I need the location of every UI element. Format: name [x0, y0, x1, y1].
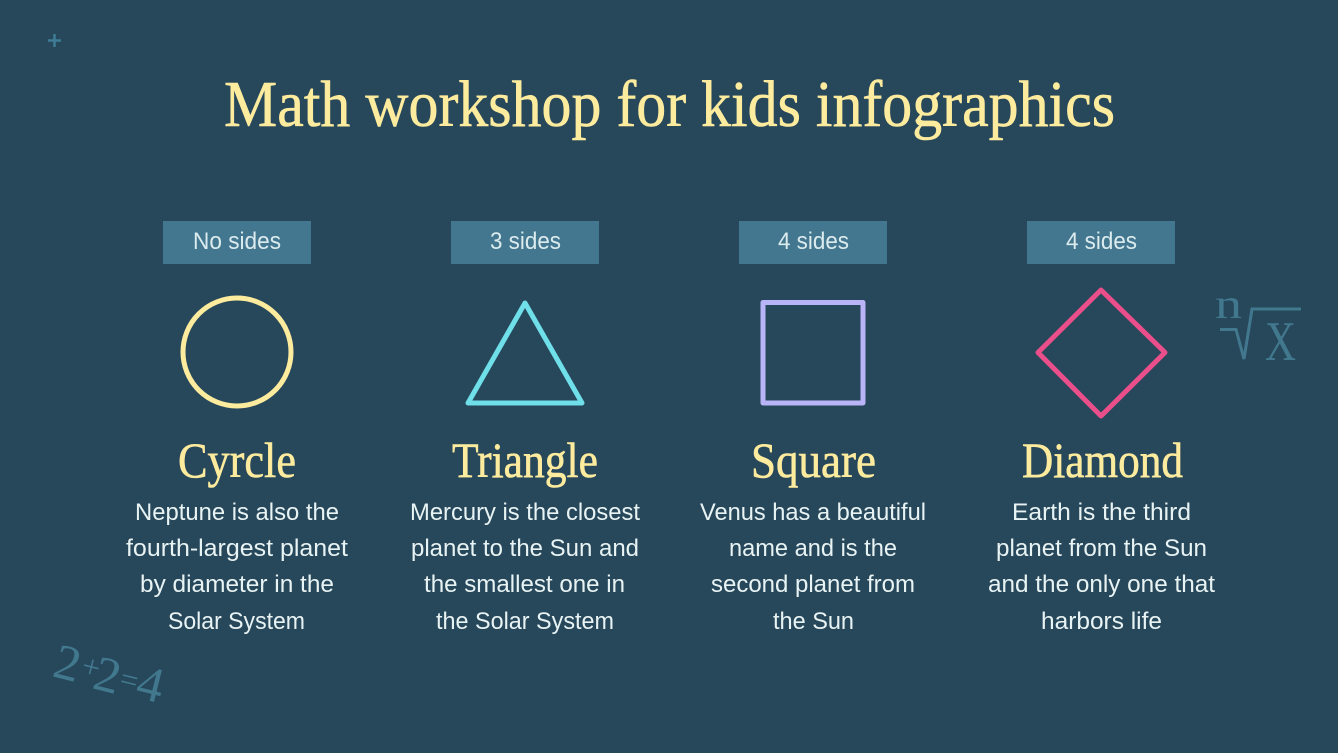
description: square: Venus has a beautiful — [700, 499, 926, 526]
icon: diamond — [1038, 290, 1165, 416]
heading: Diamond: Diamond — [1022, 432, 1183, 488]
column: triangle — [410, 221, 640, 635]
decorative formula: nth root of x — [1215, 282, 1301, 373]
column: diamond — [988, 221, 1215, 635]
badge: no sides — [163, 221, 311, 264]
decorative plus sign — [48, 34, 61, 47]
decorative formula: 2+2=4: 2 — [88, 644, 127, 705]
description: triangle: the Solar System — [436, 608, 614, 635]
description: circle: Neptune is also the — [135, 499, 339, 526]
description: diamond: planet from the Sun — [996, 535, 1207, 562]
description: triangle: the smallest one in — [424, 571, 625, 598]
description: diamond — [988, 499, 1215, 635]
description: triangle: Mercury is the closest — [410, 499, 640, 526]
description: square: second planet from — [711, 571, 915, 598]
heading: Cyrcle: Cyrcle — [178, 432, 296, 488]
badge: 4 sides: 4 sides — [778, 228, 849, 255]
description: triangle: planet to the Sun and — [411, 535, 639, 562]
description: circle: by diameter in the — [140, 571, 334, 598]
description: circle: fourth-largest planet — [126, 535, 348, 562]
description: diamond: Earth is the third — [1012, 499, 1191, 526]
column: circle — [126, 221, 348, 635]
decorative formula: 2+2=4 — [48, 632, 170, 714]
icon: square — [763, 302, 863, 403]
description: square — [700, 499, 926, 635]
decorative formula: 2+2=4: 4 — [131, 653, 170, 714]
badge: 3 sides — [451, 221, 599, 264]
description: triangle — [410, 499, 640, 635]
decorative formula: 2+2=4: 2 — [48, 632, 87, 693]
badge: 4 sides: 4 sides — [1066, 228, 1137, 255]
decorative formula: nth root of x: X — [1265, 311, 1296, 373]
description: diamond: harbors life — [1041, 608, 1162, 635]
icon: triangle — [468, 303, 582, 403]
column: square — [700, 221, 926, 635]
icon: circle — [183, 298, 291, 406]
description: circle: Solar System — [168, 608, 305, 635]
badge: no sides: No sides — [193, 228, 281, 255]
heading: Triangle: Triangle — [452, 432, 598, 488]
title: Math workshop for kids infographics — [224, 68, 1115, 141]
decorative formula: nth root of x: n — [1215, 282, 1242, 328]
badge: 3 sides: 3 sides — [490, 228, 561, 255]
decorative formula: 2+2=4: = — [116, 660, 143, 699]
description: square: name and is the — [729, 535, 897, 562]
decorative formula: 2+2=4: + — [78, 647, 105, 686]
description: square: the Sun — [773, 608, 854, 635]
badge: 4 sides — [1027, 221, 1175, 264]
heading: Square: Square — [751, 432, 876, 488]
description: circle — [126, 499, 348, 635]
description: diamond: and the only one that — [988, 571, 1215, 598]
badge: 4 sides — [739, 221, 887, 264]
